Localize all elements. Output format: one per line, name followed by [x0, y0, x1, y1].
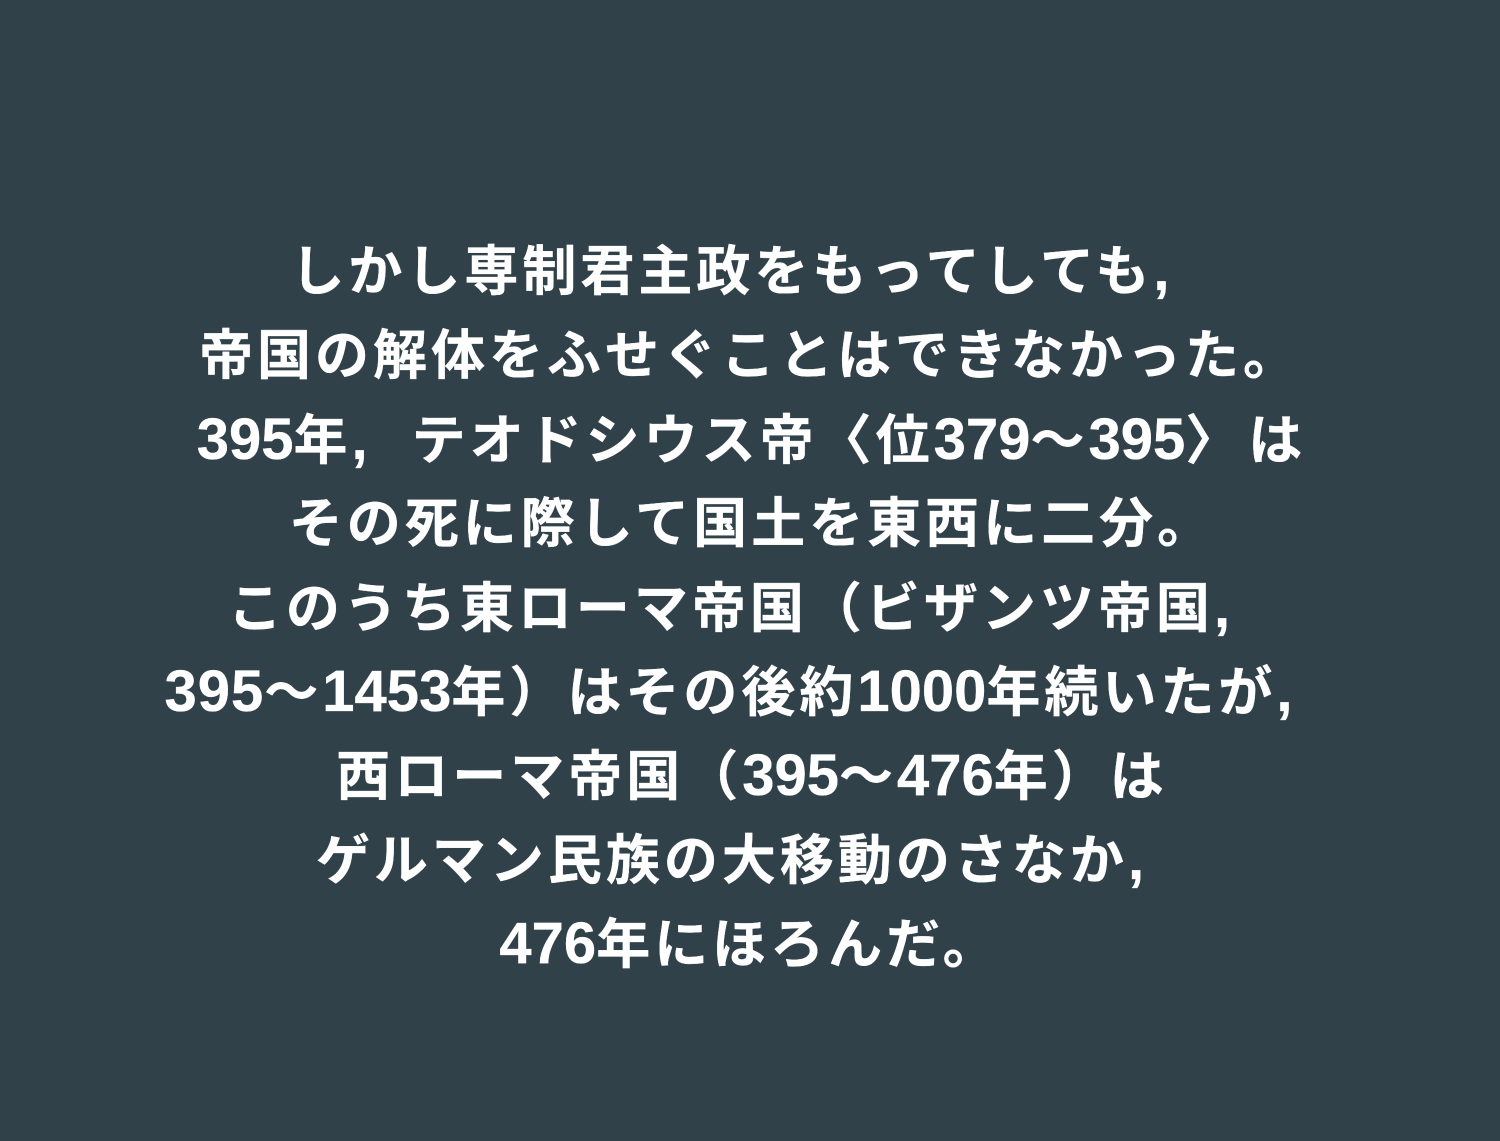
line 5: このうち東ローマ帝国（ビザンツ帝国,	[228, 575, 1230, 640]
line 7: 西ローマ帝国（395～476年）は	[336, 743, 1168, 808]
line 2: 帝国の解体をふせぐことはできなかった。	[199, 326, 1301, 386]
line 9: 476年にほろんだ。	[499, 911, 1001, 976]
line 8: ゲルマン民族の大移動のさなか,	[316, 827, 1144, 892]
line 1: しかし専制君主政をもってしても,	[290, 238, 1170, 303]
line 4: その死に際して国土を東西に二分。	[289, 494, 1215, 554]
line 6: 395～1453年）はその後約1000年続いたが,	[165, 659, 1292, 724]
line 3: 395年, テオドシウス帝〈位379～395〉は	[197, 407, 1306, 472]
